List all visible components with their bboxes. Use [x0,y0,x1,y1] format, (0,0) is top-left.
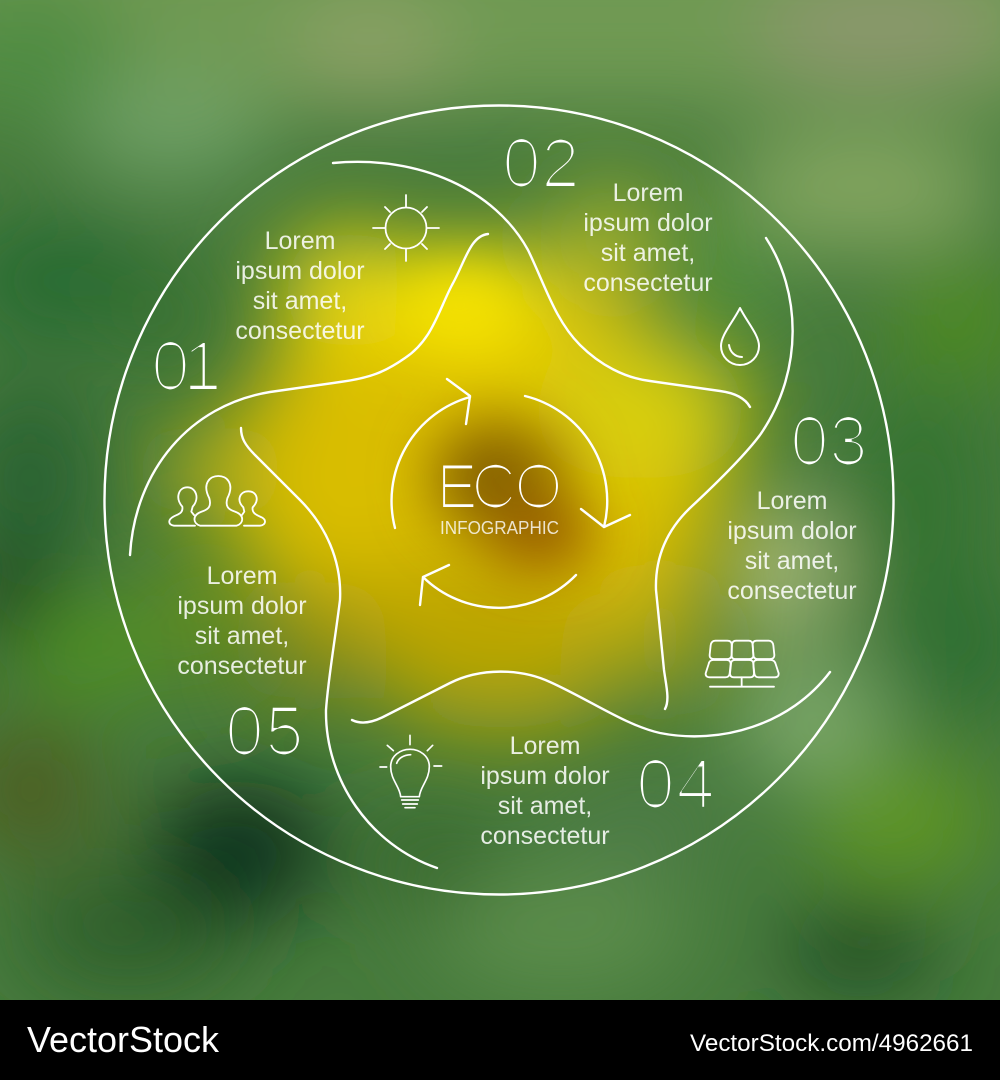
swirl 02 [333,162,750,407]
swirl 03 [656,238,793,709]
text block 03: consectetur [727,577,857,605]
text block 04: ipsum dolor [480,762,610,790]
ECO: ECO [436,452,563,522]
text block 01: sit amet, [253,287,347,315]
icon: people [169,476,265,526]
text block 01: Lorem [265,227,335,255]
text block 04: sit amet, [498,792,592,820]
icon: solar panel [706,641,779,687]
arrow two [525,396,630,527]
text block 05: ipsum dolor [177,592,307,620]
INFOGRAPHIC: INFOGRAPHIC [440,517,559,538]
swirl 04 [352,672,830,736]
text block 03: sit amet, [745,547,839,575]
text block 01: consectetur [235,317,365,345]
text block 05: consectetur [177,652,307,680]
arrow three [420,565,576,608]
text block 04: consectetur [480,822,610,850]
text block 04: Lorem [510,732,580,760]
text block 02: sit amet, [601,239,695,267]
image id: VectorStock.com/4962661 [690,1030,973,1057]
text block 02: ipsum dolor [583,209,713,237]
text block 02: consectetur [583,269,713,297]
icon: sun [373,195,439,261]
footer bar [0,1000,1000,1080]
text block 05: Lorem [207,562,277,590]
icon: water drop [721,308,759,365]
VectorStock logo: VectorStock [27,1019,220,1060]
step numbers [151,124,868,823]
text block 05: sit amet, [195,622,289,650]
swirl 01 [130,234,488,555]
text block 03: Lorem [757,487,827,515]
outer circle [104,106,894,894]
number 03: 03 [790,402,868,480]
text block 01: ipsum dolor [235,257,365,285]
central cycle arrows [392,379,630,608]
center title [436,452,563,538]
arrow one [392,379,470,528]
number 02: 02 [502,124,580,202]
number 05: 05 [225,692,304,770]
swirl segments forming the central star [130,162,830,868]
number 01: 01 [151,327,222,405]
text block 03: ipsum dolor [727,517,857,545]
icon: light bulb [380,735,442,808]
number 04: 04 [636,745,715,823]
swirl 05 [241,428,437,868]
text block 02: Lorem [613,179,683,207]
